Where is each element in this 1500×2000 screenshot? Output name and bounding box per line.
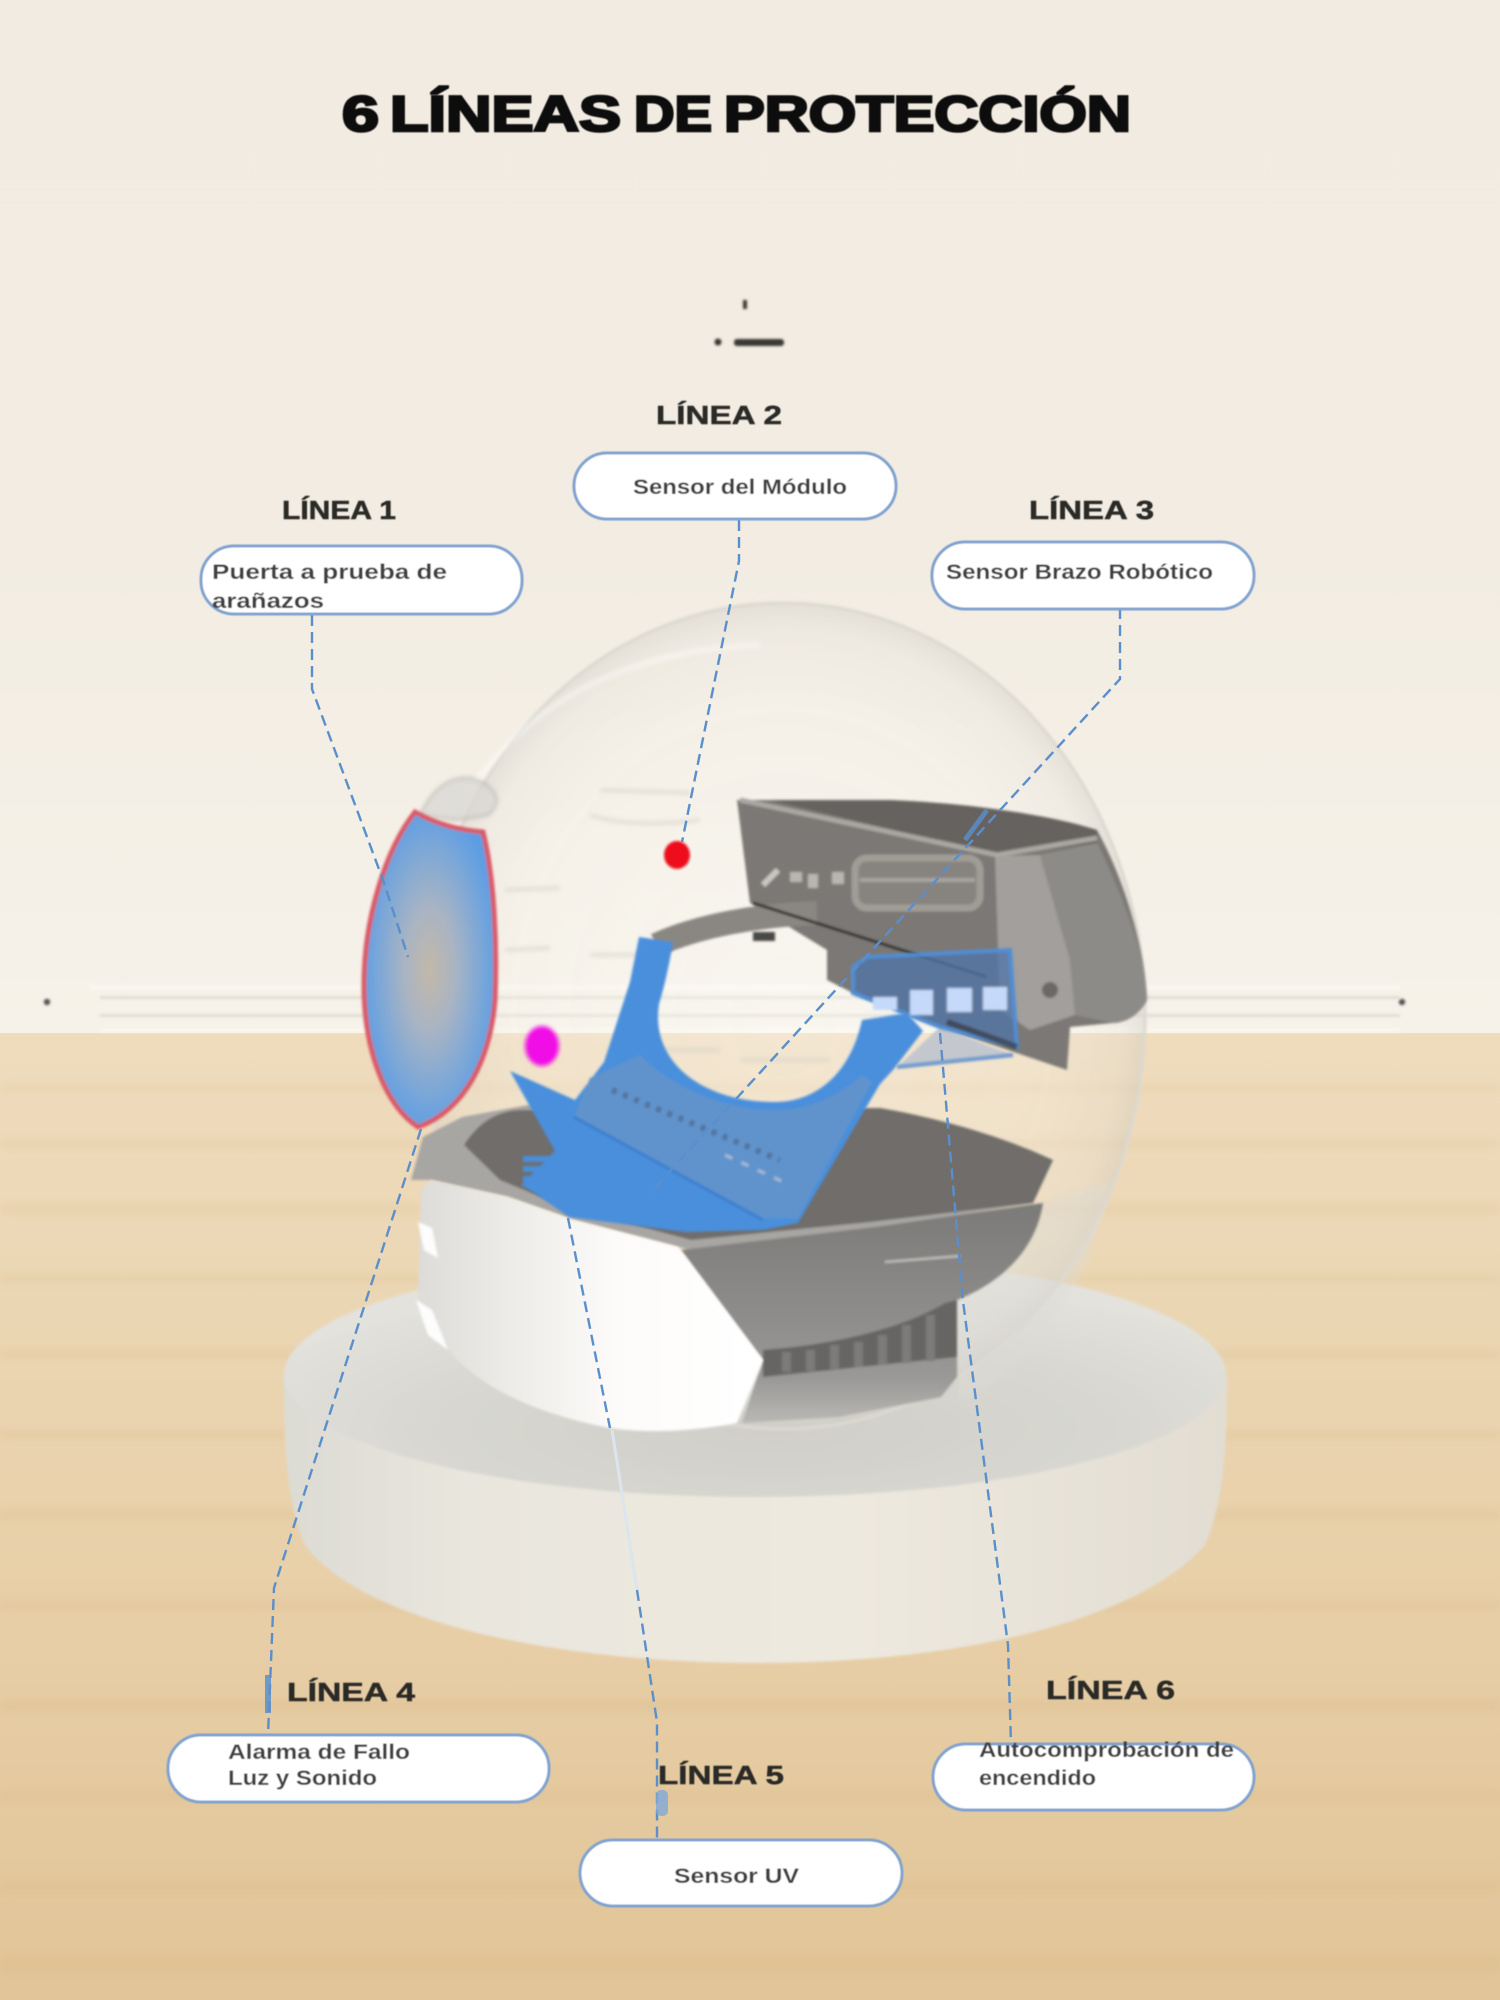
- callout: Línea 4: LÍNEA 4: [287, 1677, 416, 1707]
- callout: Línea 5: [580, 1760, 902, 1906]
- callout: Línea 2: Sensor del Módulo: [633, 476, 847, 499]
- robot base bowl: [411, 1105, 1053, 1423]
- callout: Línea 6: encendido: [979, 1767, 1096, 1790]
- callout: Línea 6: LÍNEA 6: [1046, 1675, 1175, 1705]
- callout: Línea 3: LÍNEA 3: [1029, 495, 1154, 525]
- callout: Línea 4: Alarma de Fallo: [228, 1741, 410, 1764]
- callout: Línea 1: Puerta a prueba de: [212, 561, 447, 584]
- callout: Línea 3: [932, 495, 1254, 609]
- background wall: [0, 0, 1500, 1033]
- title: [342, 86, 1131, 142]
- callout: Línea 6: Autocomprobación de: [979, 1739, 1234, 1762]
- blue robotic arm: [510, 937, 1013, 1232]
- title: LÍNEAS: [390, 86, 621, 142]
- highlighted door: [364, 812, 496, 1127]
- title: 6: [342, 86, 379, 142]
- baseboard lines: [44, 985, 1405, 1032]
- title: DE: [634, 86, 712, 142]
- wooden floor: [0, 1033, 1500, 2000]
- pedestal: [284, 1253, 1227, 1663]
- callout: Línea 5: Sensor UV: [674, 1865, 799, 1888]
- glass sphere: [421, 603, 1145, 1429]
- robot arm module: [656, 800, 1147, 1070]
- callout: Línea 5: LÍNEA 5: [658, 1760, 784, 1790]
- shell details: [416, 1222, 448, 1350]
- small dash marks: [714, 300, 784, 346]
- callout: Línea 1: [201, 495, 522, 614]
- door hinge: [420, 778, 496, 820]
- title: PROTECCIÓN: [724, 86, 1131, 142]
- callout: Línea 2: LÍNEA 2: [656, 400, 782, 430]
- translucent blue sensor panel: [853, 950, 1017, 1067]
- callout: Línea 3: Sensor Brazo Robótico: [946, 561, 1213, 584]
- red sensor dot: [664, 841, 690, 869]
- magenta sensor dot: [525, 1026, 559, 1066]
- callout: Línea 2: [574, 400, 896, 519]
- callout: Línea 6: [933, 1675, 1254, 1810]
- white shell: [416, 1180, 763, 1431]
- callout: Línea 4: Luz y Sonido: [228, 1767, 377, 1790]
- callout lines: [265, 520, 1120, 1840]
- callout: Línea 1: LÍNEA 1: [282, 495, 396, 525]
- callout: Línea 1: arañazos: [212, 590, 324, 613]
- callout: Línea 4: [168, 1677, 549, 1802]
